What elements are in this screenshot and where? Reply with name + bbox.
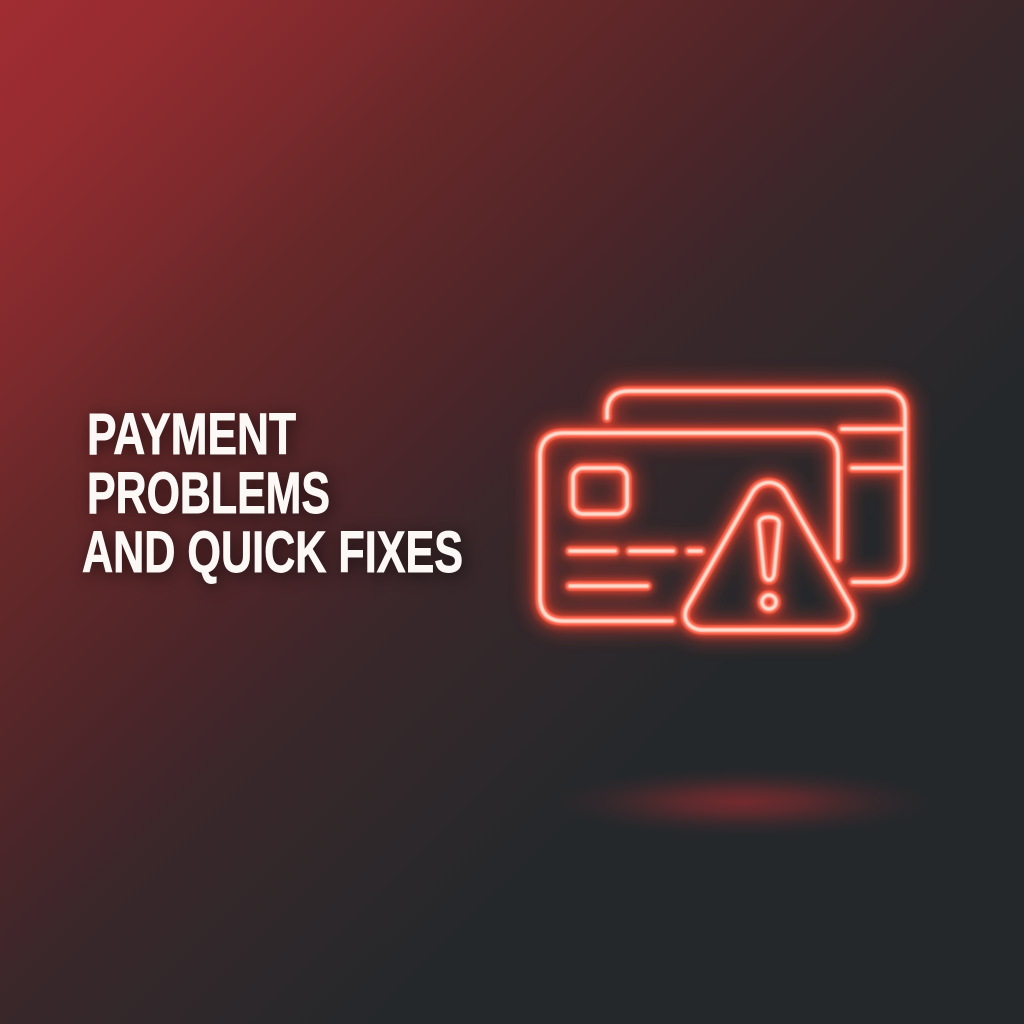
- icon: neon credit cards with warning triangle: [540, 391, 905, 630]
- title: [82, 402, 466, 588]
- floor reflection glow: [552, 768, 932, 836]
